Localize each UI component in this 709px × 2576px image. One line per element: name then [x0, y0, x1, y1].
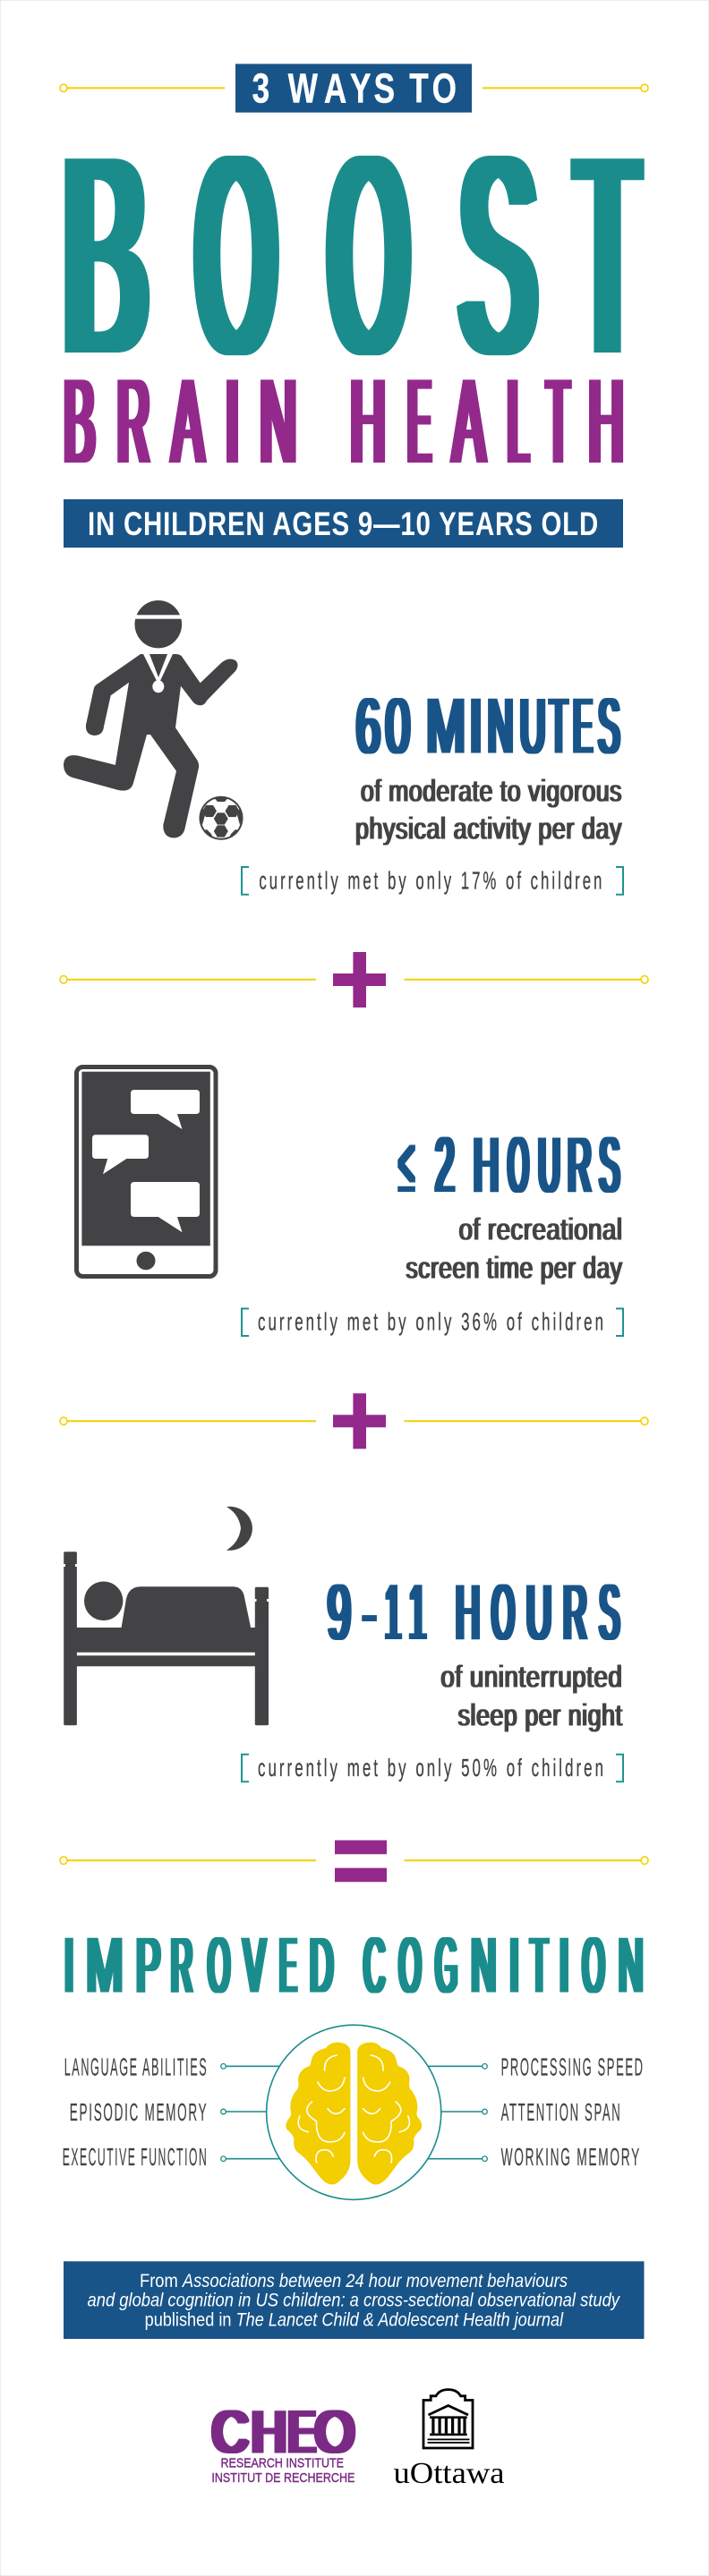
heading: 2 HOURS or less	[399, 1120, 619, 1209]
circle outline	[267, 2025, 441, 2199]
stat: 60 minutes	[242, 682, 623, 895]
heading: 9-11 HOURS: O	[491, 1568, 515, 1656]
description: of moderate to vigorous	[361, 775, 622, 809]
logo: CHEO Research Institute: C	[212, 2398, 248, 2464]
heading: 60 MINUTES: E	[573, 682, 593, 770]
citation panel: and global cognition in US children: a cross-sectional observational study	[88, 2291, 620, 2311]
heading: BOOST	[64, 98, 637, 412]
icon: brain right hemisphere	[357, 2042, 422, 2185]
text: S	[598, 682, 619, 770]
heading: 60 MINUTES: I	[469, 682, 483, 770]
heading: BRAIN HEALTH: I	[226, 353, 239, 489]
diagram: brain with cognition labels: EPISODIC MEMORY	[70, 2098, 208, 2126]
title banner: 3 ways to	[60, 64, 648, 113]
heading: BRAIN HEALTH: E	[408, 353, 431, 489]
heading: IMPROVED COGNITION: I	[509, 1921, 519, 2010]
icon: soccer player	[64, 600, 243, 840]
heading: BOOST: O	[329, 98, 407, 412]
description	[440, 1661, 623, 1732]
heading: IMPROVED COGNITION: D	[310, 1921, 333, 2010]
heading: BRAIN HEALTH: A	[453, 353, 485, 489]
heading: IMPROVED COGNITION: M	[86, 1921, 124, 2010]
divider: equals	[60, 1841, 648, 1882]
description: of uninterrupted	[440, 1661, 622, 1695]
diagram: brain with cognition labels: EXECUTIVE FUNCTION	[63, 2143, 208, 2171]
heading: 60 MINUTES: M	[426, 682, 466, 770]
text: S	[600, 1568, 619, 1656]
heading: 9-11 HOURS: 9	[328, 1568, 351, 1656]
heading: IMPROVED COGNITION: R	[171, 1921, 192, 2010]
heading: BRAIN HEALTH	[64, 353, 623, 489]
wordmark: uOttawa	[394, 2457, 505, 2490]
title banner: 3 ways to: 3 WAYS TO	[252, 65, 457, 111]
divider: plus	[60, 1393, 648, 1449]
heading: IMPROVED COGNITION: G	[435, 1921, 457, 2010]
heading: 9-11 HOURS: -	[363, 1568, 376, 1656]
heading: 9-11 HOURS: H	[456, 1568, 480, 1656]
heading: IMPROVED COGNITION: C	[363, 1921, 385, 2010]
citation panel: From Associations between 24 hour movement behaviours	[140, 2271, 568, 2291]
description: physical activity per day	[355, 812, 622, 846]
heading: BRAIN HEALTH: B	[64, 353, 95, 489]
labels: left column	[63, 2053, 208, 2171]
heading: 2 HOURS or less: O	[508, 1120, 528, 1209]
heading: 60 MINUTES: T	[550, 682, 568, 770]
text: N	[619, 1921, 643, 2010]
description	[355, 775, 622, 846]
logo: CHEO Research Institute: INSTITUT DE RECHERCHE	[211, 2470, 354, 2486]
heading: IMPROVED COGNITION: N	[471, 1921, 496, 2010]
heading: BRAIN HEALTH: R	[117, 353, 149, 489]
heading: BOOST: B	[64, 98, 148, 412]
subtitle banner: ages	[64, 499, 623, 548]
heading: IMPROVED COGNITION: O	[208, 1921, 230, 2010]
logo: CHEO Research Institute: O	[315, 2398, 354, 2464]
icon: uOttawa crest	[423, 2390, 473, 2448]
heading: BRAIN HEALTH: L	[508, 353, 528, 489]
heading: 60 MINUTES: 6	[356, 682, 380, 770]
heading: IMPROVED COGNITION: E	[279, 1921, 296, 2010]
heading: 9-11 HOURS: 1	[385, 1568, 401, 1656]
heading: 2 HOURS or less: R	[568, 1120, 592, 1209]
heading: 9-11 HOURS: 1	[409, 1568, 426, 1656]
connector lines	[221, 2063, 487, 2162]
icon: tablet with chat bubbles	[77, 1067, 216, 1276]
heading: 60 MINUTES: N	[488, 682, 513, 770]
heading: IMPROVED COGNITION: V	[243, 1921, 266, 2010]
heading: 60 MINUTES	[356, 682, 619, 770]
logo: CHEO Research Institute: RESEARCH INSTITUTE	[220, 2456, 344, 2471]
logo: CHEO Research Institute: H	[252, 2398, 286, 2464]
heading: BOOST: S	[460, 98, 535, 412]
heading: 2 HOURS or less: H	[474, 1120, 499, 1209]
description: screen time per day	[406, 1251, 623, 1285]
heading: IMPROVED COGNITION: T	[531, 1921, 548, 2010]
heading: 9-11 HOURS: R	[563, 1568, 587, 1656]
text: H	[589, 353, 623, 489]
stat: 9 to 11 hours	[242, 1568, 623, 1781]
heading: 2 HOURS or less: ≤	[399, 1120, 414, 1209]
description: of recreational	[459, 1213, 623, 1247]
logo: CHEO Research Institute: E	[288, 2398, 315, 2464]
heading: IMPROVED COGNITION: O	[399, 1921, 421, 2010]
heading: IMPROVED COGNITION: I	[560, 1921, 569, 2010]
icon: soccer ball	[199, 796, 243, 840]
diagram: brain with cognition labels: LANGUAGE ABILITIES	[64, 2053, 208, 2080]
heading: 60 MINUTES: 0	[386, 682, 410, 770]
text: S	[600, 1120, 619, 1209]
logo: CHEO Research Institute	[211, 2398, 354, 2486]
heading: BRAIN HEALTH: H	[351, 353, 385, 489]
heading: BOOST: O	[197, 98, 275, 412]
heading: 2 HOURS or less: 2	[435, 1120, 455, 1209]
heading: BRAIN HEALTH: A	[172, 353, 203, 489]
heading: IMPROVED COGNITION	[64, 1921, 644, 2010]
heading: BRAIN HEALTH: N	[260, 353, 296, 489]
citation panel	[64, 2261, 645, 2339]
heading: BRAIN HEALTH: T	[547, 353, 569, 489]
heading: 9-11 HOURS	[328, 1568, 619, 1656]
logo: uOttawa	[394, 2390, 505, 2490]
description: sleep per night	[458, 1698, 623, 1732]
diagram: brain with cognition labels	[63, 2025, 645, 2199]
heading: IMPROVED COGNITION: O	[583, 1921, 604, 2010]
labels: right column	[501, 2053, 645, 2171]
heading: 2 HOURS or less: U	[538, 1120, 560, 1209]
divider: plus	[60, 952, 648, 1007]
stat: 2 hours	[242, 1120, 623, 1336]
icon: child sleeping in bed with moon	[64, 1507, 269, 1725]
icon: brain left hemisphere	[286, 2042, 350, 2185]
description	[406, 1213, 623, 1285]
citation panel: published in The Lancet Child & Adolescent Health journal	[145, 2309, 564, 2330]
heading: 60 MINUTES: U	[520, 682, 545, 770]
heading: IMPROVED COGNITION: I	[64, 1921, 73, 2010]
heading: IMPROVED COGNITION: P	[136, 1921, 160, 2010]
heading: 9-11 HOURS: U	[526, 1568, 551, 1656]
